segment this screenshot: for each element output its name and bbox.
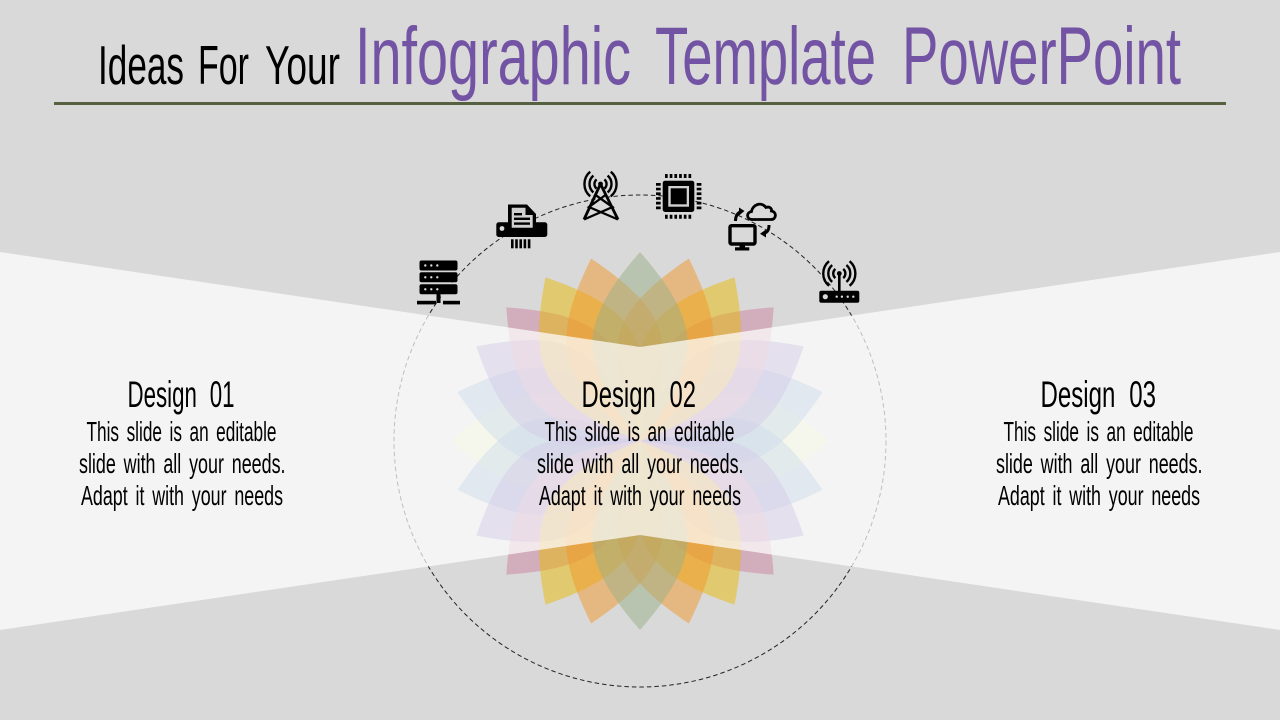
translucent white bow-tie band xyxy=(0,252,1280,630)
title: Infographic xyxy=(355,11,631,102)
icon: wifi router xyxy=(819,261,859,303)
text block: Design 02: Design 02 xyxy=(582,374,696,415)
text block: Design 01: slide with all your needs. xyxy=(79,448,286,479)
text block: Design 02: This slide is an editable xyxy=(544,416,734,447)
icon: shredder xyxy=(496,204,547,248)
text block: Design 03 xyxy=(996,374,1202,511)
text block: Design 01: This slide is an editable xyxy=(86,416,276,447)
title: For xyxy=(198,34,249,96)
text block: Design 03: Design 03 xyxy=(1040,374,1156,415)
icon: monitor and cloud sync xyxy=(730,204,775,250)
text block: Design 01 xyxy=(79,374,286,511)
dashed circle xyxy=(394,195,886,687)
title xyxy=(98,11,1181,102)
icon: server xyxy=(417,260,460,304)
title: Your xyxy=(265,34,340,96)
title rule xyxy=(54,102,1226,105)
lotus petal diagram xyxy=(445,246,835,636)
icon: processor chip xyxy=(656,174,701,219)
title: Template xyxy=(655,11,876,102)
text block: Design 02 xyxy=(537,374,744,511)
text block: Design 02: Adapt it with your needs xyxy=(539,480,741,511)
title: Ideas xyxy=(98,34,184,96)
text block: Design 01: Adapt it with your needs xyxy=(81,480,283,511)
icon: signal tower xyxy=(584,172,618,220)
text block: Design 02: slide with all your needs. xyxy=(537,448,744,479)
text block: Design 01: Design 01 xyxy=(128,374,234,415)
